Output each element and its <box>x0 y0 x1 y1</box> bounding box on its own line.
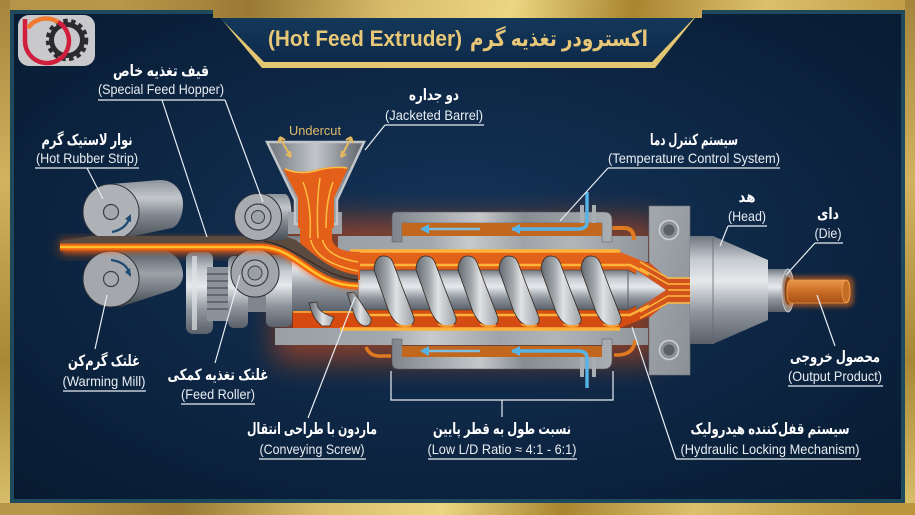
screw shaft <box>358 270 666 310</box>
flights <box>374 256 414 326</box>
warming mill: bottom roller <box>83 251 183 307</box>
label: feed roller: (Feed Roller) <box>181 386 255 402</box>
label: jacketed barrel <box>365 87 484 150</box>
label: low L/D ratio: نسبت طول به قطر پایین <box>433 421 571 439</box>
label: die: (Die) <box>814 225 842 241</box>
label: die <box>786 206 843 275</box>
label: hot rubber strip: نوار لاستیک گرم <box>42 130 132 149</box>
special feed roller <box>234 194 291 240</box>
heat glow <box>60 218 660 362</box>
head <box>690 236 768 344</box>
label: feed roller: غلتک تغذیه کمکی <box>168 367 268 384</box>
warming mill: top roller <box>83 180 183 240</box>
label: jacketed barrel: دو جداره <box>409 87 459 104</box>
head flange <box>636 206 690 375</box>
label: conveying screw: (Conveying Screw) <box>260 441 364 457</box>
label: hydraulic locking mechanism: سیستم قفل‌کننده هیدرولیک <box>690 421 850 438</box>
label: head: هد <box>738 189 756 206</box>
label: warming mill <box>62 295 146 391</box>
label: hydraulic locking mechanism <box>632 327 861 459</box>
label: temperature control system: (Temperature Control System) <box>608 150 780 166</box>
glowing inner lines <box>340 251 652 329</box>
label: feed roller <box>168 275 268 404</box>
label: conveying screw <box>247 297 377 459</box>
gear drive and feed roller <box>186 249 292 334</box>
melt stream and rubber strip <box>60 225 360 286</box>
label: output product: (Output Product) <box>788 368 882 384</box>
label: output product <box>788 295 883 386</box>
label: warming mill: غلتک گرم‌کن <box>68 351 140 370</box>
label: jacketed barrel: (Jacketed Barrel) <box>385 107 483 123</box>
label: undercut: Undercut <box>289 123 341 138</box>
label: hot rubber strip: (Hot Rubber Strip) <box>36 150 138 166</box>
label: head <box>720 189 767 246</box>
label: low L/D ratio: (Low L/D Ratio ≈ 4:1 - 6:1) <box>428 441 576 457</box>
title plaque <box>213 0 702 68</box>
title text: (Hot Feed Extruder) <box>268 26 462 51</box>
barrel lower feed section <box>283 236 368 328</box>
label: temperature control system: سیستم کنترل دما <box>650 132 738 149</box>
die <box>768 269 794 312</box>
label: conveying screw: ماردون با طراحی انتقال <box>247 421 377 438</box>
undercut arrows <box>278 137 353 157</box>
output product <box>784 276 854 307</box>
title text: اکسترودر تغذیه گرم <box>470 25 648 52</box>
label: temperature control system <box>560 132 780 221</box>
logo <box>18 15 95 66</box>
bottom jacket <box>366 339 635 388</box>
hopper <box>267 137 364 240</box>
label: low L/D ratio <box>391 371 613 459</box>
barrel walls <box>275 328 648 345</box>
label: special feed hopper: قیف تغذیه خاص <box>113 63 209 80</box>
barrel with screw <box>275 236 672 345</box>
label: head: (Head) <box>728 208 766 224</box>
label: hot rubber strip <box>35 130 139 199</box>
label: hydraulic locking mechanism: (Hydraulic Locking Mechanism) <box>680 441 860 457</box>
label: output product: محصول خروجی <box>790 349 880 366</box>
label: special feed hopper <box>98 63 263 237</box>
top jacket <box>392 192 634 242</box>
label: warming mill: (Warming Mill) <box>62 373 146 389</box>
title text <box>268 25 648 52</box>
label: special feed hopper: (Special Feed Hopper) <box>98 81 224 97</box>
orange flight edges <box>396 324 619 326</box>
label: die: دای <box>817 206 839 223</box>
